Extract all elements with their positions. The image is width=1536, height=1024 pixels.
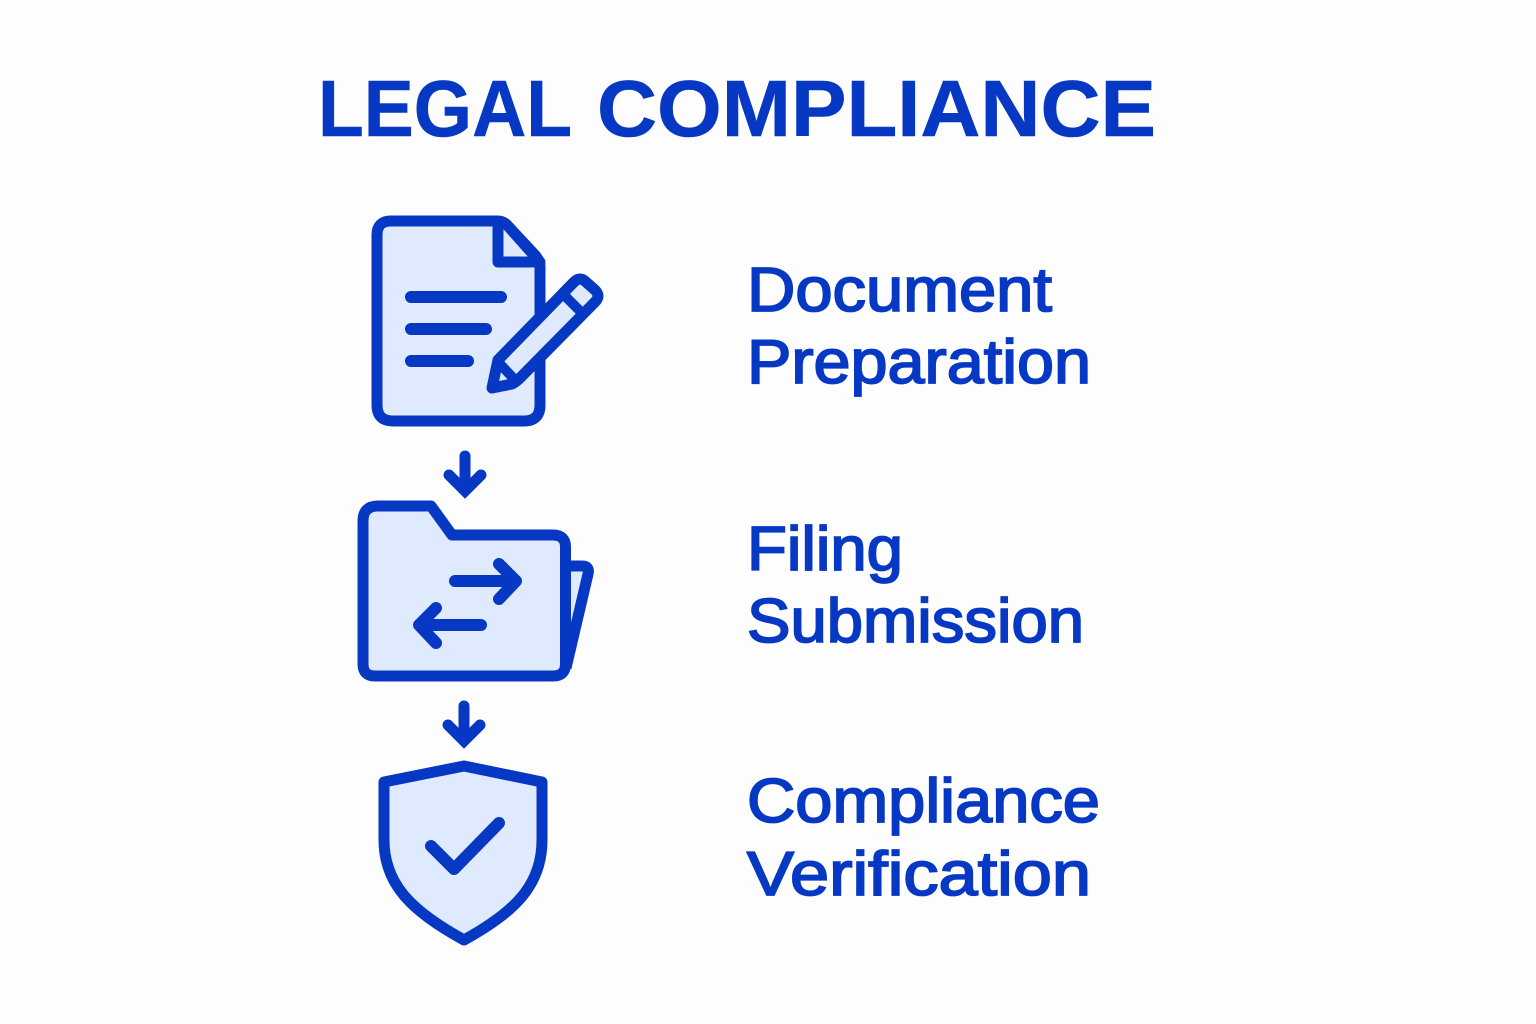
label: compliance verification: Verification xyxy=(747,840,1091,909)
label: filing submission xyxy=(747,515,1084,656)
label: compliance verification xyxy=(747,767,1100,909)
exchange arrows xyxy=(419,564,516,643)
title xyxy=(318,64,1156,153)
document text lines xyxy=(411,297,501,361)
label: document preparation: Document xyxy=(747,256,1052,325)
icon: shield with check xyxy=(384,766,542,940)
folded corner xyxy=(498,222,540,262)
shield xyxy=(384,766,542,940)
document sheet xyxy=(377,221,540,421)
back page xyxy=(566,566,588,668)
label: document preparation: Preparation xyxy=(747,328,1091,397)
icon: document with pencil xyxy=(377,221,598,421)
icon: folder with exchange arrows xyxy=(363,506,588,676)
title: COMPLIANCE xyxy=(597,64,1156,153)
label: document preparation xyxy=(747,256,1091,397)
arrow: filing to verification xyxy=(448,706,480,741)
label: compliance verification: Compliance xyxy=(747,767,1100,836)
label: filing submission: Filing xyxy=(747,515,903,584)
check mark xyxy=(431,823,499,869)
folder body xyxy=(363,506,566,676)
pencil xyxy=(492,279,598,388)
label: filing submission: Submission xyxy=(747,587,1084,656)
title: LEGAL xyxy=(318,64,572,153)
arrow: document to filing xyxy=(449,456,481,491)
